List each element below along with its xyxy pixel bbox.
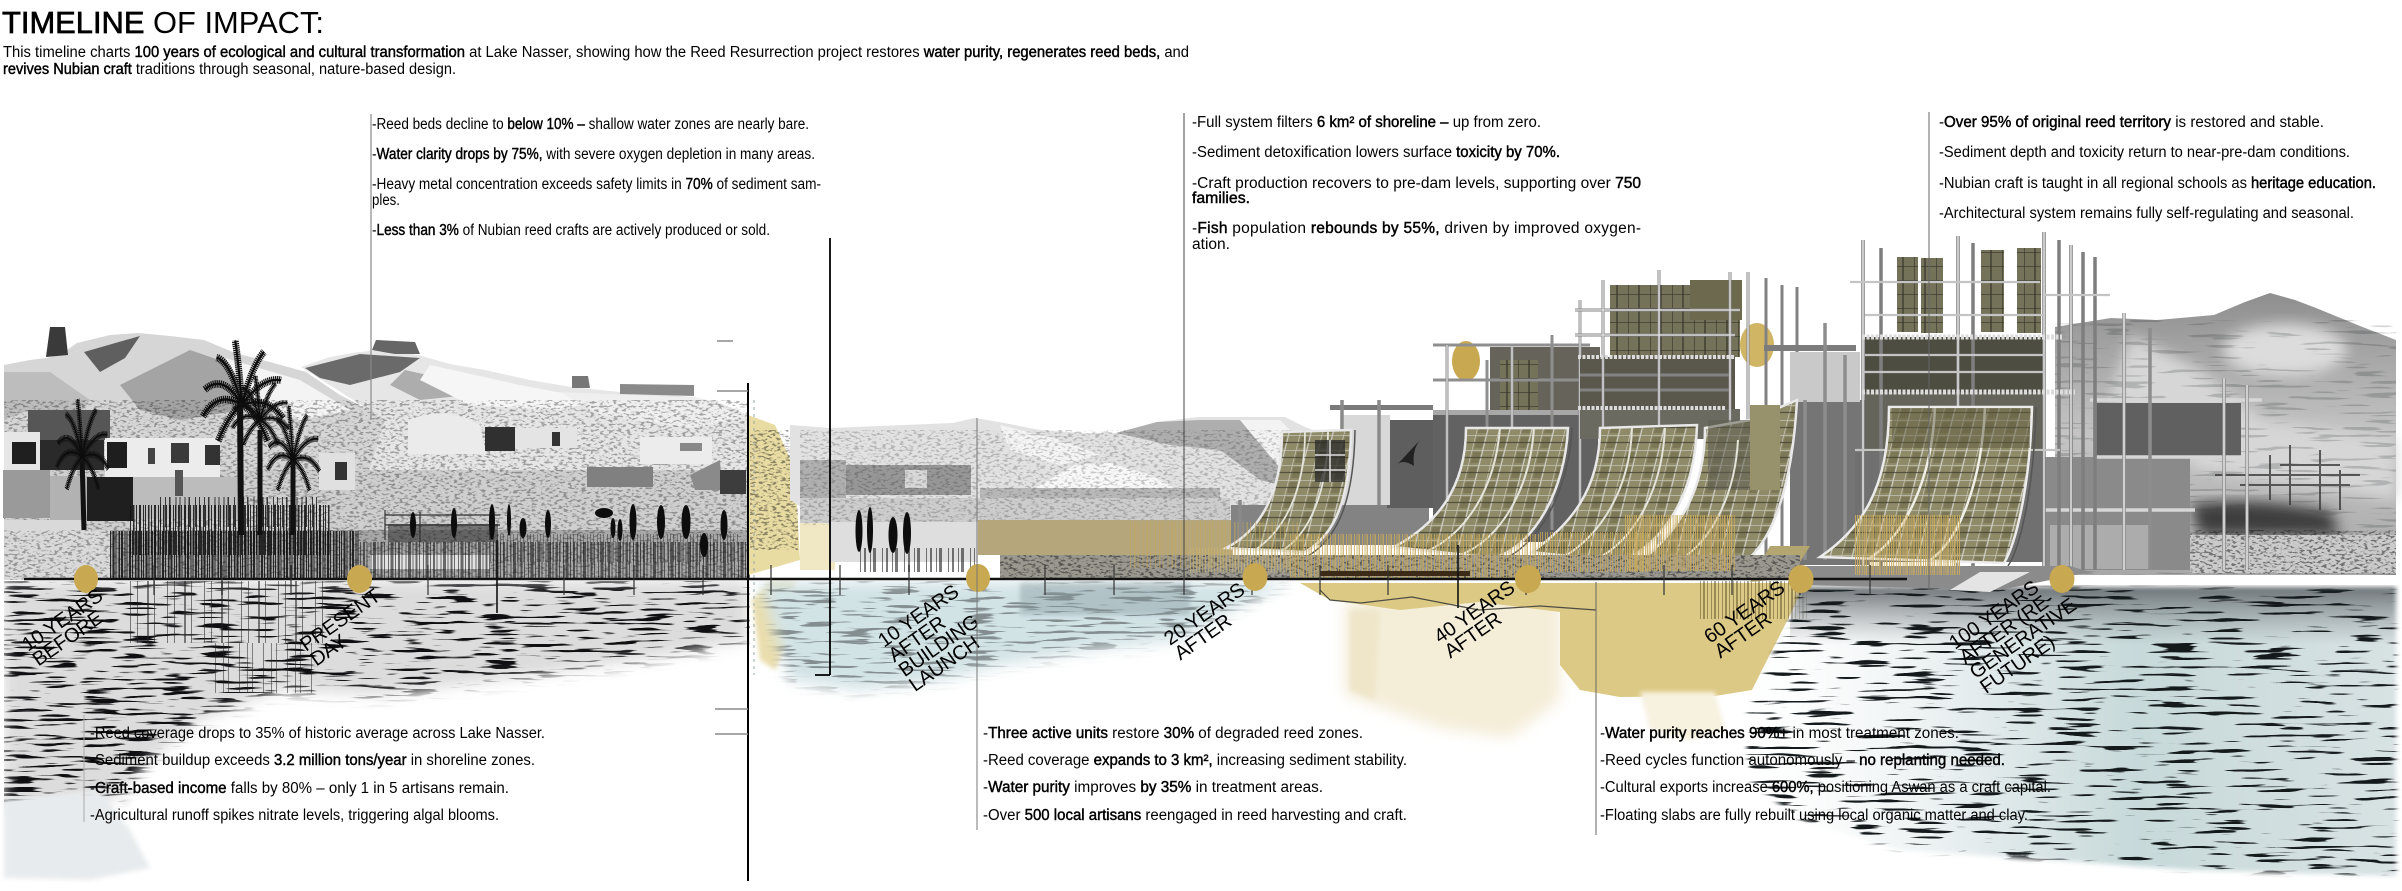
shoreline dark stretch: [1320, 571, 1470, 576]
milestone: 20 years after: [1242, 563, 1268, 591]
reeds: dark bed: [110, 512, 750, 560]
panel: present day facts: -Heavy metal concentration exceeds safety limits in 70% of sediment sam-: [372, 176, 821, 193]
scene: right mountain: [2055, 293, 2396, 575]
label: 10 years after building launch: LAUNCH: [905, 632, 984, 696]
panel: 40 to 60 years facts: -Reed cycles function autonomously – no replanting needed.: [1600, 752, 2005, 769]
shore bushes: [2190, 501, 2340, 535]
label: present day: DAY: [307, 631, 351, 671]
timeline axis: [24, 578, 1907, 580]
panel: 20 years after facts: [1184, 113, 1641, 580]
panel: 40 to 60 years facts: -Water purity reaches 90%+ in most treatment zones.: [1600, 725, 1959, 742]
panel: present day facts: -Reed beds decline to below 10% – shallow water zones are nearly bare.: [372, 116, 809, 133]
gold wash: [1300, 583, 1810, 740]
panel: 100 years after facts: -Nubian craft is taught in all regional schools as heritage education.: [1939, 175, 2376, 192]
panel: 10 years before facts: [84, 715, 545, 824]
panel: 100 years after facts: -Architectural system remains fully self-regulating and seasonal.: [1939, 205, 2354, 222]
hidden gold disc behind structure: [1452, 341, 1480, 381]
panel: 10 years after facts: -Over 500 local artisans reengaged in reed harvesting and craft.: [983, 807, 1407, 824]
scene: distant hills: [790, 417, 1340, 562]
structure: left block: [1231, 400, 1433, 545]
panel: 10 years before facts: -Agricultural runoff spikes nitrate levels, triggering algal blooms.: [90, 807, 499, 824]
milestone: 100 years after: [2050, 565, 2074, 593]
floating panel: [1750, 546, 1810, 582]
panel: 10 years before facts: -Craft-based income falls by 80% – only 1 in 5 artisans remain.: [90, 780, 509, 797]
hill shadows: [4, 327, 745, 430]
label: 100 years after: AFTER (RE-: [1956, 588, 2058, 669]
reed field: [978, 520, 1233, 555]
label: 40 years after: AFTER: [1441, 608, 1506, 663]
panel: 10 years after facts: [977, 418, 1407, 830]
panel: 20 years after facts: -Full system filters 6 km² of shoreline – up from zero.: [1192, 114, 1541, 131]
panel: 40 to 60 years facts: -Cultural exports increase 600%, positioning Aswan as a craft capital.: [1600, 779, 2051, 796]
label: 20 years after: AFTER: [1171, 610, 1236, 665]
palm: tall: [203, 340, 283, 535]
deck: [1800, 566, 2090, 590]
panel: 10 years after facts: -Three active units restore 30% of degraded reed zones.: [983, 725, 1363, 742]
golden reeds: [1130, 543, 1960, 560]
panel: 20 years after facts: families.: [1192, 190, 1250, 207]
panel: 100 years after facts: [1929, 112, 2376, 590]
intro text: This timeline charts 100 years of ecological and cultural transformation at Lake Nasser, showing how the Reed Resurrection project restores water purity, regenerates reed beds, and: [3, 44, 1189, 61]
hidden gold disc behind tower: [1740, 323, 1774, 367]
label: 60 years after: AFTER: [1711, 608, 1776, 663]
buildings: [3, 410, 746, 569]
structure: tower two: [1850, 232, 2110, 570]
panel: 20 years after facts: -Fish population rebounds by 55%, driven by improved oxygen-: [1192, 220, 1641, 237]
ground texture: [4, 400, 749, 580]
water: right: [1700, 585, 2402, 885]
fence: [385, 510, 500, 542]
panel: 10 years before facts: -Reed coverage drops to 35% of historic average across Lake Nasser.: [90, 725, 545, 742]
label: 10 years before: BEFORE: [29, 607, 107, 671]
label: 10 years before: 10 YEARS: [18, 585, 107, 656]
label: 10 years after building launch: AFTER: [885, 612, 950, 667]
label: 40 years after: 40 YEARS: [1430, 577, 1519, 648]
label: 10 years after building launch: BUILDING: [895, 611, 983, 682]
label: present day: PRESENT: [296, 585, 385, 656]
hill: left ridge: [4, 333, 385, 480]
panel: present day facts: -Water clarity drops by 75%, with severe oxygen depletion in many areas.: [372, 146, 815, 163]
scene: yellow wash over town: [748, 415, 835, 670]
milestone: 10 years after: [966, 564, 990, 592]
palm: second tall: [232, 376, 289, 535]
sail 1: [1226, 430, 1355, 556]
panel: 10 years after facts: -Reed coverage expands to 3 km², increasing sediment stability.: [983, 752, 1407, 769]
hill: central ridge: [301, 349, 748, 500]
water: left: [4, 581, 750, 880]
sail 5: [1820, 407, 2036, 566]
label: 100 years after: GENERATIVE: [1966, 594, 2080, 684]
panel: present day facts: -Less than 3% of Nubian reed crafts are actively produced or sold.: [372, 222, 770, 239]
panel: 20 years after facts: -Sediment detoxification lowers surface toxicity by 70%.: [1192, 144, 1560, 161]
structure: center block: [1764, 323, 1870, 565]
shoreline strip: [1000, 555, 1800, 579]
label: 100 years after: 100 YEARS: [1945, 577, 2043, 654]
structure: tower one: [1575, 270, 1797, 560]
panel: 20 years after facts: -Craft production recovers to pre-dam levels, supporting over 750: [1192, 175, 1641, 192]
panel: 20 years after facts: ation.: [1192, 236, 1230, 253]
people group: [856, 507, 911, 554]
label: 10 years after building launch: 10 YEARS: [874, 581, 963, 652]
panel: 100 years after facts: -Sediment depth and toxicity return to near-pre-dam conditions.: [1939, 144, 2350, 161]
sail 3: [1532, 425, 1697, 562]
water: middle teal: [750, 581, 1310, 701]
sail 4: [1640, 400, 1797, 562]
scene: left village and hills: [3, 327, 750, 580]
panel: 10 years before facts: -Sediment buildup exceeds 3.2 million tons/year in shoreline zones.: [90, 752, 535, 769]
lower ground: [4, 470, 749, 580]
hill: far ridge: [790, 417, 1340, 525]
mountain: [2055, 293, 2396, 575]
milestone: 60 years after: [1788, 565, 1814, 593]
palm: right: [268, 406, 319, 535]
milestone: present day: [347, 565, 372, 593]
far village: [846, 465, 971, 495]
sail 2: [1394, 428, 1572, 562]
palm: small left: [57, 399, 108, 530]
milestone: 40 years after: [1515, 565, 1541, 593]
intro text: revives Nubian craft traditions through seasonal, nature-based design.: [3, 61, 456, 78]
reed reflections: [130, 581, 330, 643]
vertical divider: bold line one: [747, 383, 749, 881]
structure: middle tower: [1433, 300, 1600, 542]
people silhouettes: [410, 504, 728, 557]
panel: present day facts: [371, 114, 821, 420]
milestone: 10 years before: [74, 565, 98, 593]
panel: present day facts: ples.: [372, 192, 400, 209]
title: TIMELINE OF IMPACT:: [2, 5, 324, 40]
label: 20 years after: 20 YEARS: [1160, 579, 1249, 650]
panel: 10 years after facts: -Water purity improves by 35% in treatment areas.: [983, 779, 1323, 796]
label: 60 years after: 60 YEARS: [1700, 577, 1789, 648]
label: 100 years after: FUTURE): [1976, 631, 2059, 698]
structure: right block: [2045, 313, 2262, 570]
panel: 40 to 60 years facts: -Floating slabs are fully rebuilt using local organic matter and clay.: [1600, 807, 2028, 824]
panel: 40 to 60 years facts: [1596, 582, 2051, 835]
vertical divider: bold line two: [815, 238, 830, 675]
panel: 100 years after facts: -Over 95% of original reed territory is restored and stable.: [1939, 114, 2324, 131]
structure: reed-filter building: [1226, 232, 2262, 592]
intro text: [3, 44, 1189, 78]
